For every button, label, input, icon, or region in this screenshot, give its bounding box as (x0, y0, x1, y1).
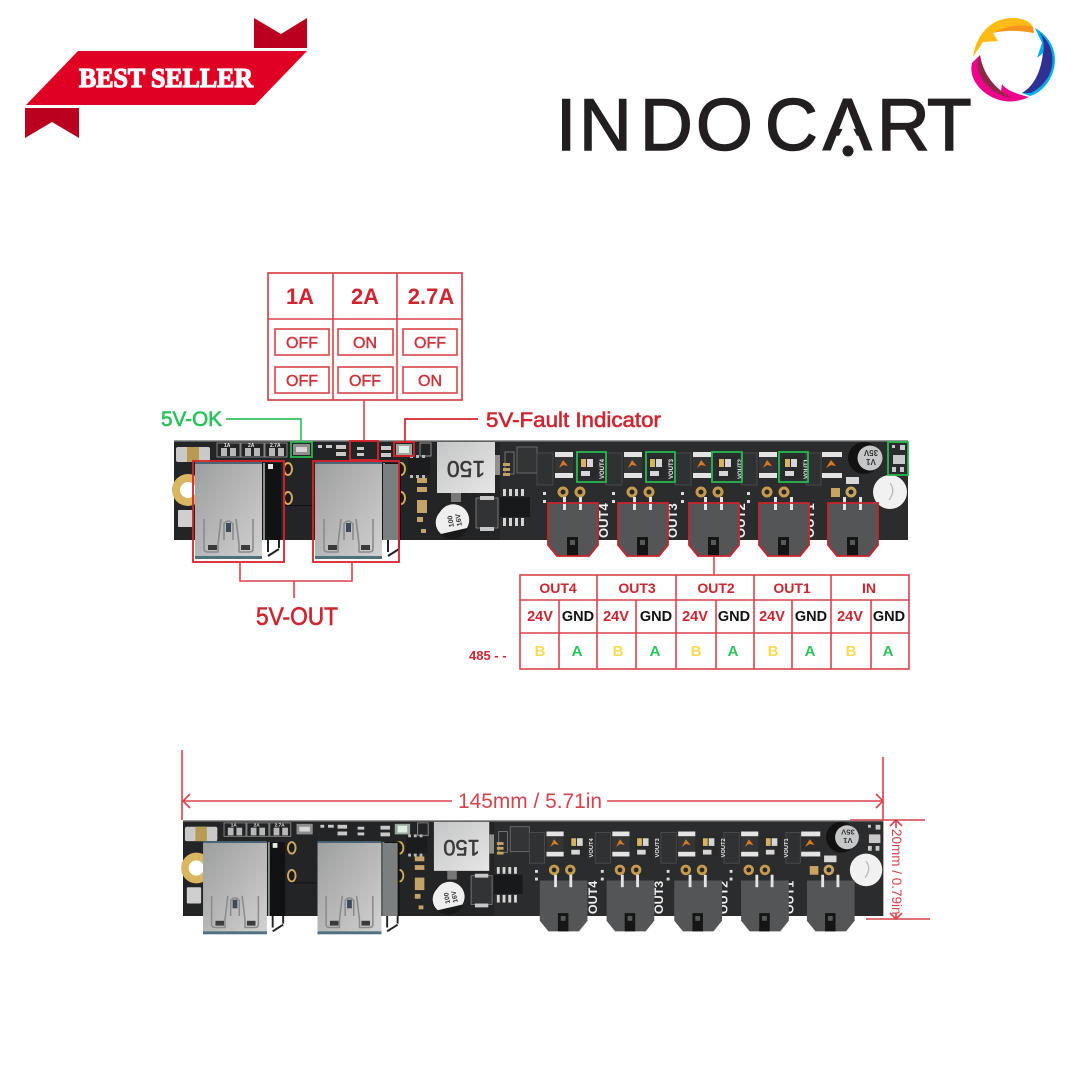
connector pinout table: A (572, 643, 583, 660)
connector pinout table: A (728, 643, 739, 660)
current selection switch table: OFF (414, 335, 446, 352)
connector pinout table: OUT3 (618, 580, 656, 596)
connector pinout table: OUT4 (539, 580, 577, 596)
annotated circuit board: 2A (248, 443, 255, 449)
callout: current selector (350, 400, 378, 460)
connector pinout table: IN (862, 580, 876, 596)
annotated circuit board: VOUT2 (738, 458, 744, 479)
connector pinout table: OUT2 (697, 580, 735, 596)
current selection switch table: ON (418, 373, 442, 390)
current selection switch table: OFF (349, 373, 381, 390)
annotated circuit board: OUT1 (802, 503, 817, 538)
connector pinout table (520, 556, 909, 669)
dimensioned circuit board: 2A (254, 823, 260, 829)
connector pinout table: 24V (837, 609, 863, 625)
connector pinout table: 24V (682, 609, 708, 625)
annotated circuit board: 100 (447, 515, 456, 528)
dimensioned circuit board: 2.7A (275, 823, 285, 829)
current selection switch table: ON (353, 335, 377, 352)
dimensioned circuit board: 1A (231, 823, 237, 829)
best seller ribbon: BEST SELLER (79, 63, 253, 93)
annotated circuit board: 150 (447, 456, 485, 482)
current selection switch table: 2.7A (408, 284, 454, 309)
connector pinout table: A (650, 643, 661, 660)
callout: 5V-OK (161, 408, 312, 457)
best seller ribbon (25, 18, 307, 138)
current selection switch table: OFF (286, 373, 318, 390)
dimensioned circuit board: VOUT2 (721, 838, 727, 857)
current selection switch table (268, 273, 462, 400)
annotated circuit board: 16V (455, 513, 464, 527)
width dimension 145mm: 145mm / 5.71in (458, 790, 602, 813)
callout: 5V-Fault Indicator (394, 409, 661, 456)
connector pinout table: B (768, 643, 779, 660)
annotated circuit board: OUT2 (733, 503, 748, 538)
dimensioned circuit board (181, 820, 883, 934)
RS485 row label: 485 - - (469, 648, 507, 663)
current selection switch table: 1A (286, 284, 314, 309)
connector pinout table: GND (873, 609, 905, 625)
connector pinout table: B (535, 643, 546, 660)
connector pinout table: 24V (603, 609, 629, 625)
connector pinout table: GND (795, 609, 827, 625)
connector pinout table: B (691, 643, 702, 660)
connector pinout table: GND (718, 609, 750, 625)
green highlight boxes on output indicators (577, 442, 908, 482)
dimensioned circuit board: VOUT1 (784, 837, 790, 857)
annotated circuit board: OUT4 (596, 503, 611, 538)
connector pinout table: B (613, 643, 624, 660)
dimensioned circuit board: V1 (843, 836, 853, 845)
callout: 5V-Fault Indicator: 5V-Fault Indicator (486, 409, 661, 432)
callout: 5V-OK: 5V-OK (161, 408, 222, 431)
dimensioned circuit board: OUT1 (783, 881, 797, 914)
dimensioned circuit board: OUT4 (586, 881, 600, 914)
connector pinout table: A (805, 643, 816, 660)
annotated circuit board: VOUT3 (669, 458, 675, 479)
annotated circuit board: V1 (866, 457, 876, 466)
dimensioned circuit board: 100 (443, 892, 452, 904)
connector pinout table: GND (562, 609, 594, 625)
callout: 5V-OUT: 5V-OUT (256, 603, 338, 631)
red outlines on connectors (548, 503, 878, 556)
width dimension 145mm (182, 750, 883, 820)
indocart logo: INDOCART (556, 85, 972, 166)
connector pinout table: B (846, 643, 857, 660)
height dimension 20mm: 20mm / 0.79in (889, 829, 904, 915)
connector pinout table: 24V (527, 609, 553, 625)
height dimension 20mm (850, 820, 930, 919)
annotated circuit board: 35V (863, 448, 878, 457)
connector pinout table: GND (640, 609, 672, 625)
dimensioned circuit board: VOUT3 (655, 838, 661, 857)
dimensioned circuit board: 35V (840, 828, 855, 837)
connector pinout table: OUT1 (773, 580, 811, 596)
annotated circuit board (172, 440, 908, 559)
indocart logo (556, 18, 1055, 166)
red highlight boxes on USB ports (193, 461, 399, 562)
dimensioned circuit board: OUT2 (717, 881, 731, 914)
callout: 5V-OUT (240, 563, 352, 631)
dimensioned circuit board: VOUT4 (589, 837, 595, 857)
annotated circuit board: 1A (224, 443, 231, 449)
annotated circuit board: VOUT1 (804, 458, 810, 479)
annotated circuit board: VOUT4 (600, 458, 606, 479)
dimensioned circuit board: OUT3 (652, 881, 666, 914)
dimensioned circuit board: 16V (451, 890, 460, 903)
current selection switch table: 2A (351, 284, 379, 309)
dimensioned circuit board: 150 (443, 835, 480, 860)
annotated circuit board: 2.7A (270, 443, 281, 449)
current selection switch table: OFF (286, 335, 318, 352)
annotated circuit board: OUT3 (665, 503, 680, 538)
connector pinout table: 24V (759, 609, 785, 625)
connector pinout table: A (883, 643, 894, 660)
